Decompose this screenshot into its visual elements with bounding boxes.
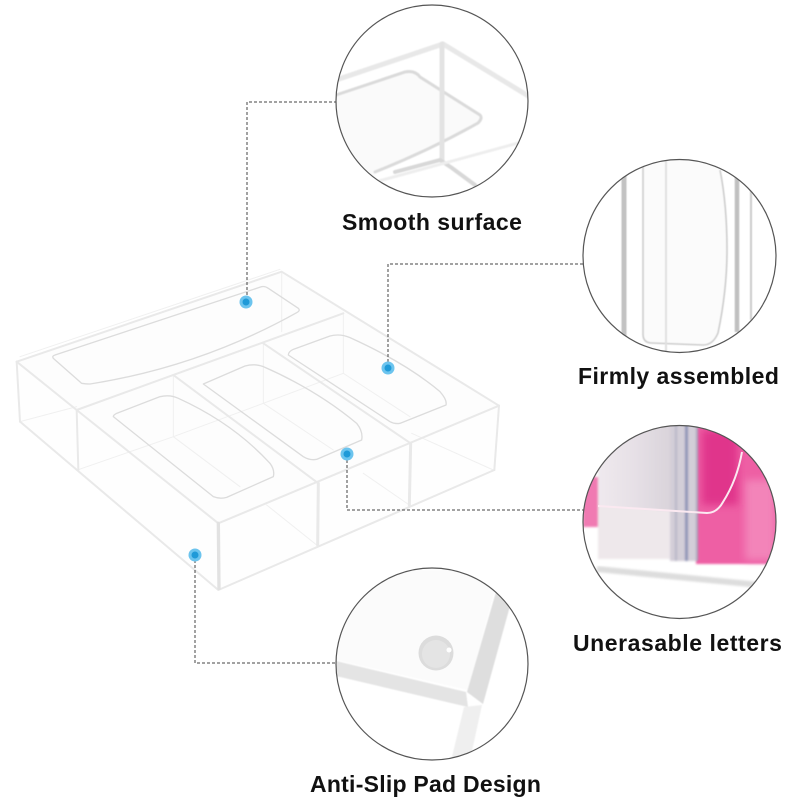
label: unerasable letters: Unerasable letters xyxy=(573,630,783,656)
detail circle: firmly assembled xyxy=(583,150,776,360)
cutout: front slot xyxy=(113,396,274,498)
leader line: unerasable letters xyxy=(347,455,584,510)
cutout: middle slot xyxy=(203,365,362,460)
marker dot: smooth surface xyxy=(240,296,252,308)
leader line: smooth surface xyxy=(247,102,336,300)
marker dot: unerasable letters xyxy=(340,448,354,460)
cutout: long back slot xyxy=(53,287,299,384)
detail circle: unerasable letters xyxy=(583,424,780,618)
leader line: anti-slip pad xyxy=(195,555,336,663)
product: acrylic organizer box xyxy=(17,269,499,590)
leader line: firmly assembled xyxy=(388,264,583,367)
marker dot: anti-slip pad xyxy=(188,548,202,562)
cutout: right slot xyxy=(288,335,446,424)
detail circle: smooth surface xyxy=(336,5,530,200)
label: anti-slip pad design: Anti-Slip Pad Design xyxy=(310,771,542,797)
detail circle: anti-slip pad xyxy=(336,568,528,765)
marker dot: firmly assembled xyxy=(382,362,394,374)
label: firmly assembled: Firmly assembled xyxy=(578,363,780,389)
label: smooth surface: Smooth surface xyxy=(342,209,523,235)
